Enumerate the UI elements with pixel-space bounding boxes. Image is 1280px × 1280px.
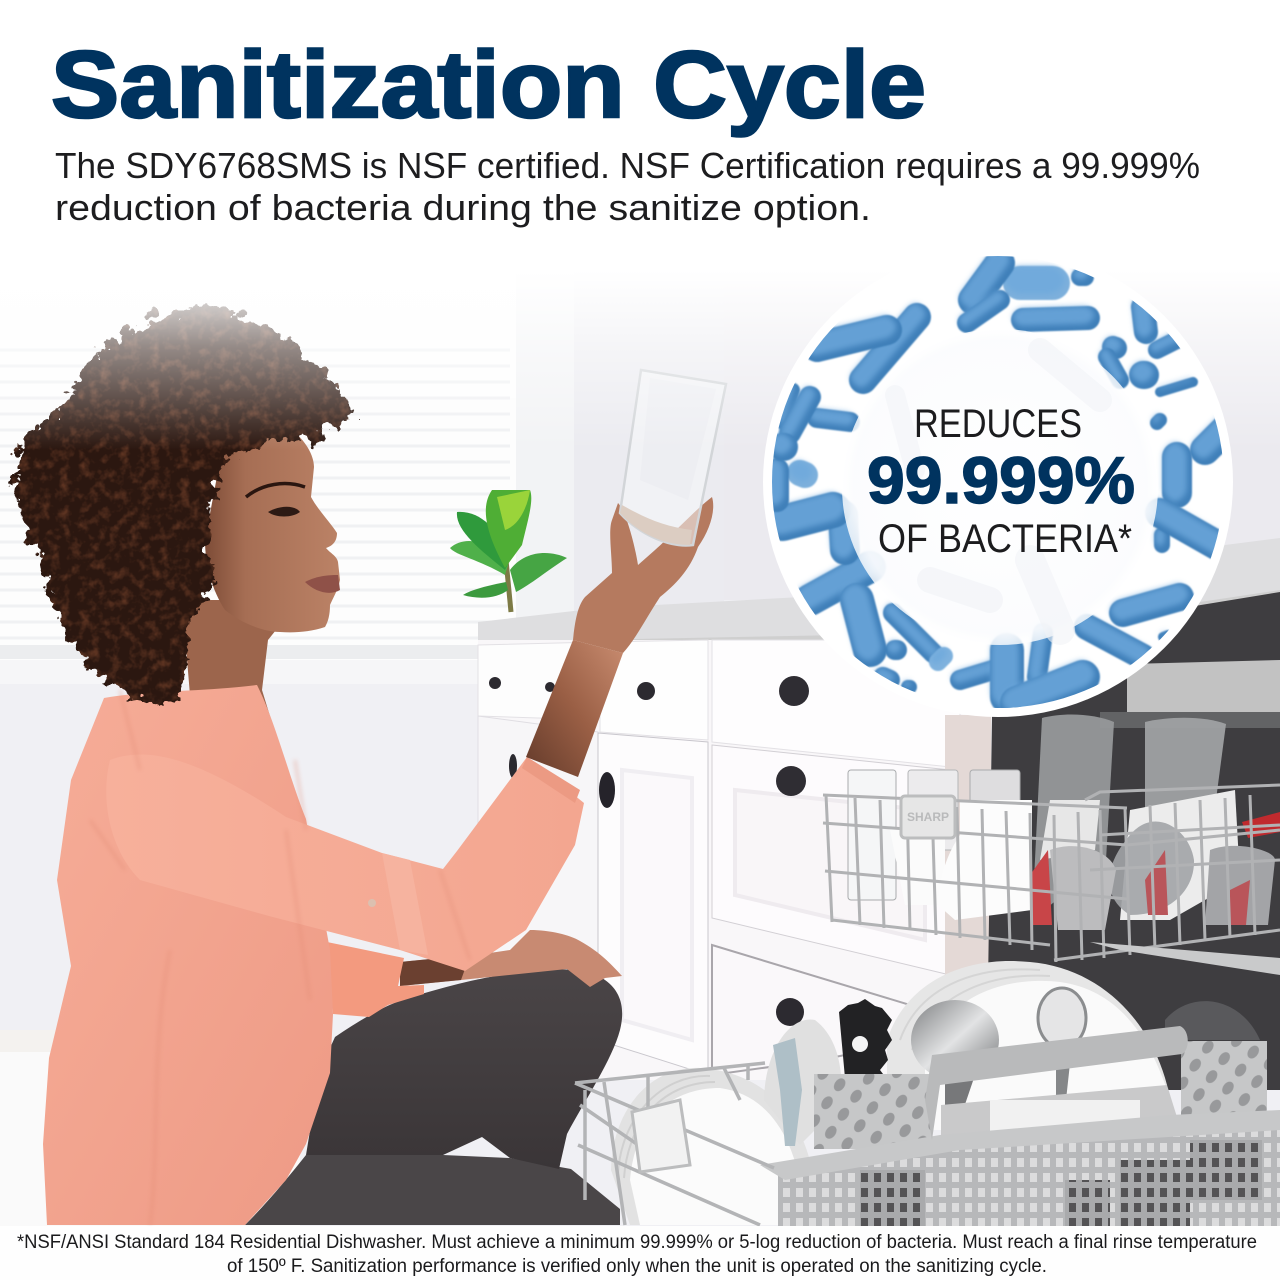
spoon (911, 1000, 999, 1080)
hand (573, 497, 713, 653)
basket handle (925, 1026, 1188, 1140)
cabinets (478, 640, 993, 1080)
footnote: *NSF/ANSI Standard 184 Residential Dishwasher. Must achieve a minimum 99.999% or 5-log reduction of bacteria. Must reach a final rinse temperature (17, 1232, 1257, 1253)
callout text (867, 402, 1135, 561)
lower rack with plates and utensils (575, 961, 1280, 1226)
footnote: of 150º F. Sanitization performance is verified only when the unit is operated on the sanitizing cycle. (227, 1256, 1047, 1277)
bacteria (777, 263, 1225, 703)
intro text (55, 145, 1200, 228)
far sleeve cuff (327, 942, 424, 1017)
intro text: reduction of bacteria during the sanitize option. (55, 187, 871, 228)
callout text: 99.999% (867, 443, 1135, 517)
cutlery basket left (814, 1074, 932, 1149)
basket bottom (941, 1085, 1181, 1150)
countertop (478, 538, 1280, 646)
wire rack (575, 1063, 774, 1225)
faint white bacteria (895, 350, 1100, 630)
bacteria circle callout (763, 247, 1233, 717)
shirt body (43, 685, 333, 1225)
leg: thigh (306, 969, 622, 1169)
shirt folds (90, 690, 470, 1225)
rack clip (632, 1100, 690, 1172)
hand on knee (400, 930, 622, 987)
cutlery basket right (1181, 1041, 1267, 1131)
callout text: OF BACTERIA* (878, 517, 1132, 561)
short glasses (848, 770, 896, 900)
rack label: SHARP (901, 796, 955, 838)
window blinds (0, 380, 510, 640)
red accents (1242, 812, 1280, 838)
woman (9, 300, 713, 1225)
plant (450, 490, 567, 612)
raised forearm (526, 640, 623, 777)
drinking glass (620, 370, 726, 545)
callout text: REDUCES (914, 402, 1082, 446)
neck (182, 600, 300, 775)
dishwasher interior (988, 592, 1280, 1090)
title: Sanitization Cycle (51, 32, 926, 138)
white dishes (890, 810, 945, 905)
tall glasses (1032, 715, 1114, 920)
whisk (1038, 988, 1086, 1048)
plates (887, 961, 1167, 1130)
rack label: SHARP: SHARP (907, 810, 949, 824)
hair (9, 300, 351, 703)
shirt sleeve (106, 755, 584, 971)
basket grid (778, 1125, 1280, 1226)
wires (823, 785, 1280, 962)
leg: lower (245, 1155, 620, 1225)
wine glass (1109, 821, 1194, 915)
upper rack with glasses and dishes (823, 715, 1280, 975)
spatula (773, 1038, 802, 1146)
footnote (0, 1226, 1280, 1280)
intro text: The SDY6768SMS is NSF certified. NSF Certification requires a 99.999% (55, 145, 1200, 186)
black scraper (839, 999, 892, 1078)
face (205, 430, 340, 632)
soft white centre (842, 329, 1158, 645)
behind plate (764, 1020, 841, 1145)
white fade over the photo top (0, 0, 1280, 450)
